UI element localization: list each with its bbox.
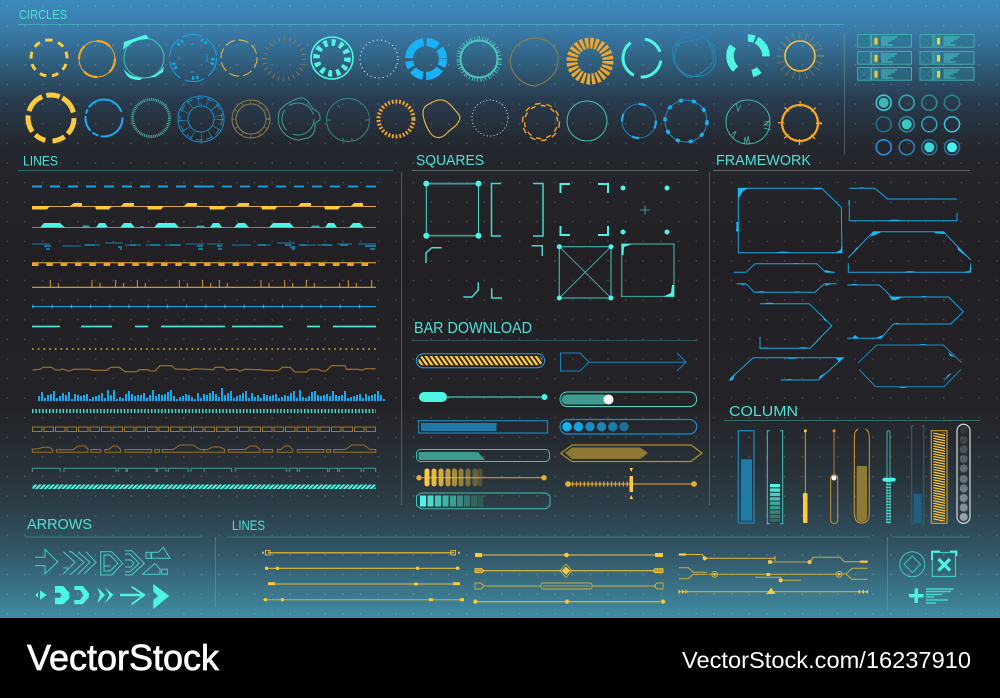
panel: small icons [900, 552, 956, 603]
line 11: blue equalizer bars [39, 388, 384, 401]
frame 4 [734, 263, 837, 292]
bar: knob slider [560, 392, 697, 406]
square: notched box [622, 244, 674, 296]
panel: connector lines [227, 517, 970, 604]
icon: circle with diamond [900, 552, 925, 577]
heading: circles: CIRCLES [19, 8, 67, 22]
line 6: yellow ticks [32, 280, 376, 287]
panel: column [724, 403, 980, 524]
circle row 2 [24, 91, 819, 145]
outline arrows [35, 547, 170, 575]
line 4: fragmented blue [32, 243, 376, 249]
frame 8 [728, 358, 843, 381]
heading: squares: SQUARES [416, 152, 484, 169]
yellow circuit lines right [678, 554, 868, 594]
frame 2 [848, 187, 957, 221]
bar: gold hexagon [561, 445, 702, 462]
panel: bar download [412, 320, 702, 509]
line 9: dotted orange [32, 348, 376, 350]
heading: bar download: BAR DOWNLOAD [414, 320, 532, 337]
frame 3 [848, 232, 971, 272]
heading: lines: LINES [23, 152, 58, 168]
watermark logo: VectorStock [27, 637, 220, 678]
line 16: cyan hatch [32, 484, 376, 489]
square: chamfered corners [426, 246, 542, 298]
icon: x box [932, 552, 956, 576]
line 7: blue ticked [32, 306, 376, 308]
line 10: wavy brown [32, 366, 376, 372]
heading: column: COLUMN [729, 403, 798, 420]
column 9 [957, 424, 970, 523]
bar: yellow segments [416, 471, 547, 484]
panel: circles [18, 8, 844, 145]
bar: blue dots [560, 420, 697, 434]
square: dotted corners [423, 181, 482, 239]
line 8: cyan segments [32, 326, 376, 328]
bar: teal blocks [416, 493, 550, 509]
bar: blue rectangle [418, 421, 548, 433]
square: brackets [492, 184, 543, 236]
yellow lines left [262, 550, 464, 600]
heading: framework: FRAMEWORK [716, 152, 811, 169]
column 2 [767, 431, 783, 524]
panel: arrows [25, 516, 203, 609]
line 2: yellow trapezoids [32, 203, 376, 210]
footer bar [0, 618, 1000, 698]
frame 7 [858, 344, 962, 388]
frame 5 [760, 303, 832, 348]
square: crossed box [557, 244, 614, 300]
heading: arrows: ARROWS [27, 516, 92, 533]
radio buttons [876, 95, 960, 155]
bar: cyan pill slider [419, 392, 548, 402]
bar: striped yellow [416, 354, 545, 368]
yellow lines middle [474, 553, 665, 604]
heading: connector lines: LINES [232, 517, 265, 533]
column 8 [931, 431, 947, 523]
line 14: brown outline shapes [32, 445, 376, 452]
bar: yellow ticked slider [565, 468, 697, 499]
bar: teal wedge [416, 450, 550, 462]
line 12: teal ticks [32, 409, 376, 413]
info cards [858, 34, 974, 80]
panel: info cards and radio buttons [858, 34, 974, 155]
panel: framework [713, 152, 971, 388]
line 1: blue dashes [32, 186, 376, 188]
column 5 [854, 429, 869, 523]
line 15: teal brackets [32, 468, 376, 472]
square: dots and cross [620, 186, 670, 234]
square: corners [560, 184, 608, 235]
line 13: brown rectangles [32, 427, 376, 432]
column 6 [882, 431, 896, 523]
panel: squares [412, 152, 698, 300]
column 4 [831, 430, 838, 524]
frame 6 [847, 284, 963, 338]
line 3: cyan trapezoids [32, 223, 376, 228]
column 3 [803, 430, 808, 523]
frame 1 [736, 188, 842, 253]
line 5: orange scallops [32, 263, 376, 264]
circle row 1 [28, 31, 820, 86]
panel: lines [18, 152, 393, 489]
bar: blue arrow [560, 353, 686, 371]
watermark url: VectorStock.com/16237910 [682, 647, 971, 673]
solid arrows [35, 584, 169, 609]
column 7 [912, 426, 924, 524]
icon: plus with text lines [909, 588, 954, 603]
column 1 [738, 431, 754, 523]
